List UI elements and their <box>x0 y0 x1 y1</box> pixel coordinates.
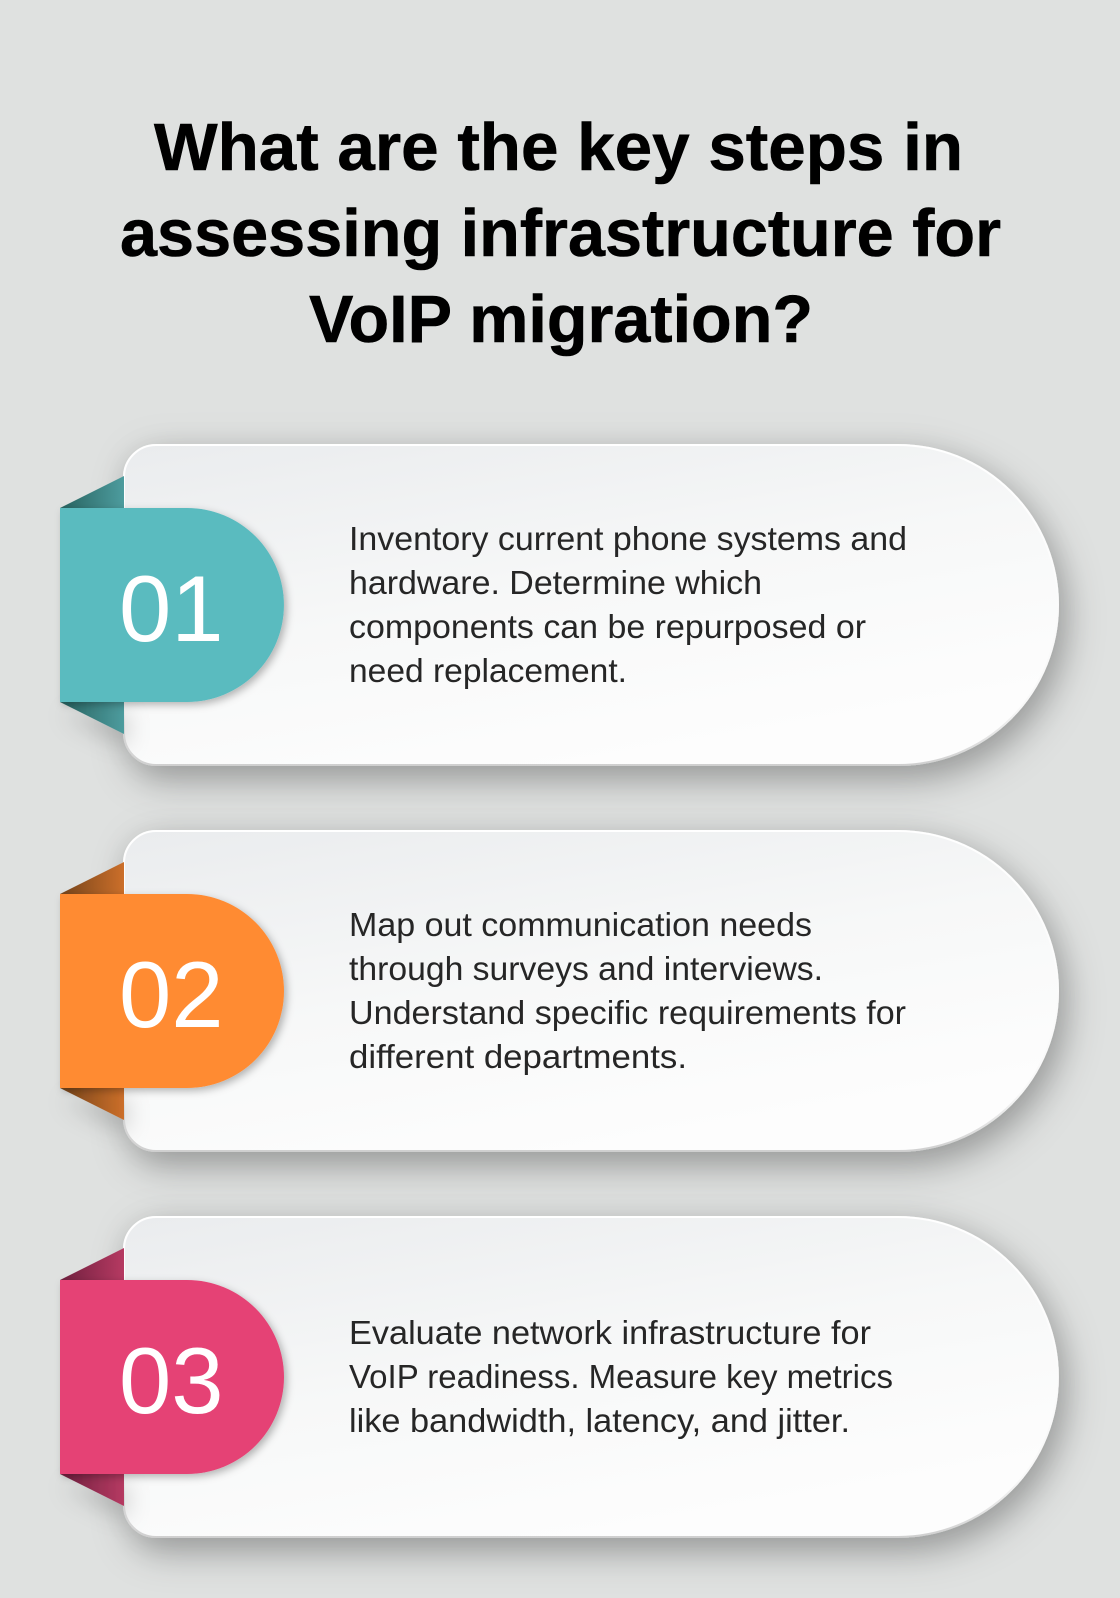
card 01 <box>124 445 1058 765</box>
text 02 <box>349 906 906 1075</box>
text 02: through surveys and interviews. <box>349 950 823 987</box>
panel: step 02 <box>60 831 1058 1151</box>
ribbon fold bottom 02 <box>60 1088 124 1120</box>
text 02: Map out communication needs <box>349 906 812 943</box>
text 01: hardware. Determine which <box>349 564 762 601</box>
number tab 01 <box>60 508 284 702</box>
card 03 <box>124 1217 1058 1537</box>
ribbon fold bottom 01 <box>60 702 124 734</box>
text 03 <box>349 1314 893 1439</box>
card 02 <box>124 831 1058 1151</box>
number 01: 01 <box>119 556 224 661</box>
number 02: 02 <box>119 942 224 1047</box>
text 03: like bandwidth, latency, and jitter. <box>349 1402 850 1439</box>
text 01: components can be repurposed or <box>349 608 866 645</box>
text 02: different departments. <box>349 1038 687 1075</box>
title: What are the key steps in <box>154 110 963 185</box>
title: VoIP migration? <box>309 282 813 357</box>
ribbon fold top 02 <box>60 862 124 894</box>
text 01: need replacement. <box>349 652 627 689</box>
text 01 <box>349 520 907 689</box>
ribbon fold bottom 03 <box>60 1474 124 1506</box>
number 03: 03 <box>119 1328 224 1433</box>
text 01: Inventory current phone systems and <box>349 520 907 557</box>
number tab 02 <box>60 894 284 1088</box>
panel: step 01 <box>60 445 1058 765</box>
title: assessing infrastructure for <box>120 196 1001 271</box>
text 03: Evaluate network infrastructure for <box>349 1314 871 1351</box>
title <box>120 110 1001 357</box>
number tab 03 <box>60 1280 284 1474</box>
ribbon fold top 03 <box>60 1248 124 1280</box>
text 02: Understand specific requirements for <box>349 994 906 1031</box>
ribbon fold top 01 <box>60 476 124 508</box>
panel: step 03 <box>60 1217 1058 1537</box>
text 03: VoIP readiness. Measure key metrics <box>349 1358 893 1395</box>
